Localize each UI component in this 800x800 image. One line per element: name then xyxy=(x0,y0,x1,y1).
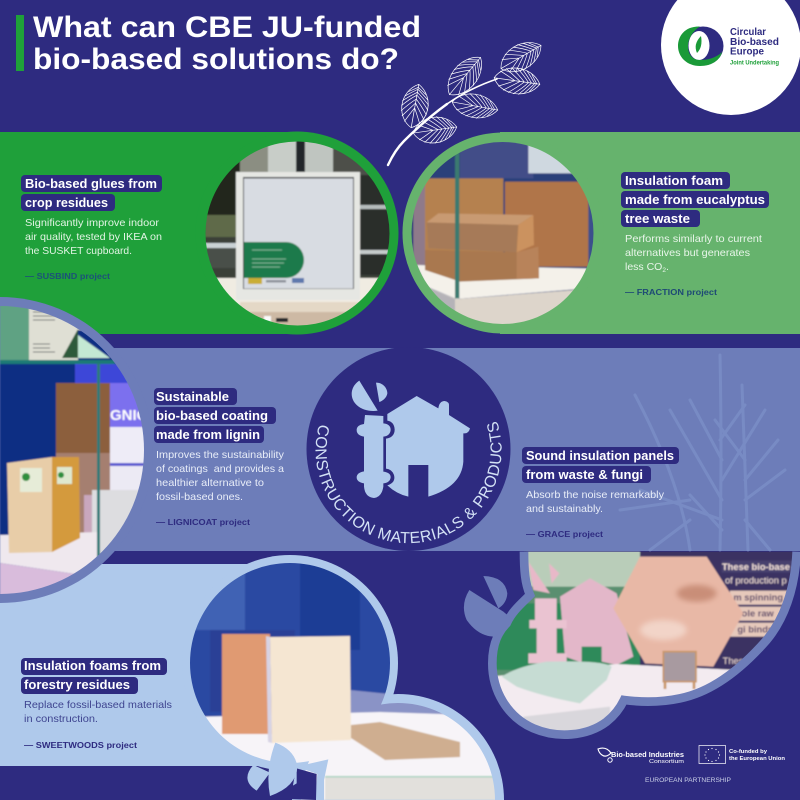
photo: insulation foam panels xyxy=(185,560,505,800)
title accent bar xyxy=(16,15,24,71)
logo: Bio-based Industries Consortium: Bio-based Industries xyxy=(611,752,684,759)
source: SUSBIND: — SUSBIND project xyxy=(25,271,110,281)
photo: SUSKET cupboard xyxy=(206,142,390,326)
body: coating: Improves the sustainability xyxy=(156,449,285,461)
body: coating: healthier alternative to xyxy=(156,477,264,489)
body: foam: . xyxy=(666,261,669,273)
panel: green band xyxy=(0,132,398,334)
logo: co-funded by the EU: Co-funded by xyxy=(729,749,768,755)
body: panels xyxy=(526,489,665,515)
text block: FRACTION xyxy=(621,172,769,297)
photo: sound insulation panels: gi binds xyxy=(737,625,773,635)
body: forestry foams xyxy=(24,699,172,725)
photo: sound insulation panels xyxy=(496,552,792,730)
icon ring: central circle xyxy=(306,347,510,551)
panel: medium blue band xyxy=(0,348,800,551)
photo: sound insulation panels: ole raw xyxy=(742,609,775,619)
icon: construction house and leaves xyxy=(352,381,470,498)
text block: SWEETWOODS xyxy=(21,658,172,750)
logo: Circular Bio-based Europe xyxy=(661,0,800,115)
photo: sound insulation panels: m spinning xyxy=(733,593,783,603)
body: coating: fossil-based ones. xyxy=(156,491,243,503)
title: bio-based solutions do? xyxy=(33,43,399,76)
logo: Bio-based Industries Consortium: Consortium xyxy=(649,759,684,765)
body: coating xyxy=(156,449,285,503)
body: panels: and sustainably. xyxy=(526,503,603,515)
heading: coating xyxy=(154,388,276,443)
body: foam: Performs similarly to current xyxy=(625,233,762,245)
heading: coating: Sustainable xyxy=(156,390,229,404)
heading: glues: Bio-based glues from xyxy=(25,177,157,191)
logo: Circular Bio-based Europe: Joint Undertaking xyxy=(730,60,779,66)
icon: pillar xyxy=(357,415,391,498)
photo: lignin coated wood xyxy=(0,306,144,594)
source: LIGNICOAT: — LIGNICOAT project xyxy=(156,517,250,527)
source: FRACTION: — FRACTION project xyxy=(625,287,717,297)
icon: medium blue leaves xyxy=(464,576,513,637)
heading: foam: tree waste xyxy=(625,212,690,226)
heading: foam: made from eucalyptus xyxy=(625,193,765,207)
heading: panels: from waste & fungi xyxy=(526,468,643,482)
body: glues: Significantly improve indoor xyxy=(25,217,160,229)
icon: house xyxy=(386,396,470,497)
logo: Circular Bio-based Europe: Circular xyxy=(730,27,766,38)
body: panels: Absorb the noise remarkably xyxy=(526,489,665,501)
icon: small leaf xyxy=(376,383,387,402)
photo: sound insulation panels: of production p xyxy=(725,576,787,586)
footer label: EUROPEAN PARTNERSHIP xyxy=(645,777,731,784)
icon: half leaf xyxy=(268,743,297,796)
body: glues: the SUSKET cupboard. xyxy=(25,245,132,257)
logo: Circular Bio-based Europe: Europe xyxy=(730,46,764,58)
icon: small leaf xyxy=(247,765,270,791)
heading: glues xyxy=(21,175,162,211)
body: glues: air quality, tested by IKEA on xyxy=(25,231,162,243)
logo: Circular Bio-based Europe: Bio-based xyxy=(730,37,779,48)
logo: co-funded by the EU xyxy=(699,746,786,764)
photo: insulation foam blocks xyxy=(412,142,594,324)
photo: lignin coated wood: GNIC xyxy=(110,407,148,424)
source: SWEETWOODS: — SWEETWOODS project xyxy=(24,740,137,750)
body: foam: alternatives but generates xyxy=(625,247,750,259)
heading: foam xyxy=(621,172,769,227)
heading: forestry foams xyxy=(21,658,167,694)
heading: glues: crop residues xyxy=(25,196,108,210)
title xyxy=(33,11,421,76)
body: foam: less CO xyxy=(625,261,662,273)
heading: forestry foams: Insulation foams from xyxy=(24,659,161,673)
logo: Bio-based Industries Consortium xyxy=(598,748,684,765)
decorative reed plant xyxy=(620,355,785,550)
icon: leaves over photo xyxy=(247,743,328,800)
title: What can CBE JU-funded xyxy=(33,11,421,44)
icon: large leaf xyxy=(352,381,378,411)
photo ring: lignin coating xyxy=(0,297,153,603)
photo ring: sound insulation panels xyxy=(492,552,797,735)
heading: foam: Insulation foam xyxy=(625,174,723,188)
body: glues xyxy=(25,217,162,257)
text block: LIGNICOAT xyxy=(154,388,285,527)
heading: panels xyxy=(522,447,679,483)
body: forestry foams: in construction. xyxy=(24,713,98,725)
panel: light green band xyxy=(402,132,800,334)
body: foam xyxy=(625,233,762,274)
panel: light blue band xyxy=(0,564,300,766)
heading: coating: bio-based coating xyxy=(156,409,268,423)
body: coating: of coatings and provides a xyxy=(156,463,284,475)
heading: panels: Sound insulation panels xyxy=(526,449,674,463)
icon: branch illustration xyxy=(388,35,547,165)
text block: SUSBIND xyxy=(21,175,162,281)
photo ring: sweetwoods xyxy=(182,555,504,800)
heading: coating: made from lignin xyxy=(156,428,260,442)
body: foam: 2 xyxy=(662,267,666,274)
photo: sound insulation panels: These d xyxy=(723,656,756,666)
source: GRACE: — GRACE project xyxy=(526,529,603,539)
heading: forestry foams: forestry residues xyxy=(24,678,130,692)
circular label: CONSTRUCTION MATERIALS & PRODUCTS xyxy=(315,422,502,544)
logo: co-funded by the EU: the European Union xyxy=(729,756,786,762)
photo: sound insulation panels: These bio-base xyxy=(722,562,790,572)
text block: GRACE xyxy=(522,447,679,539)
body: forestry foams: Replace fossil-based materials xyxy=(24,699,172,711)
